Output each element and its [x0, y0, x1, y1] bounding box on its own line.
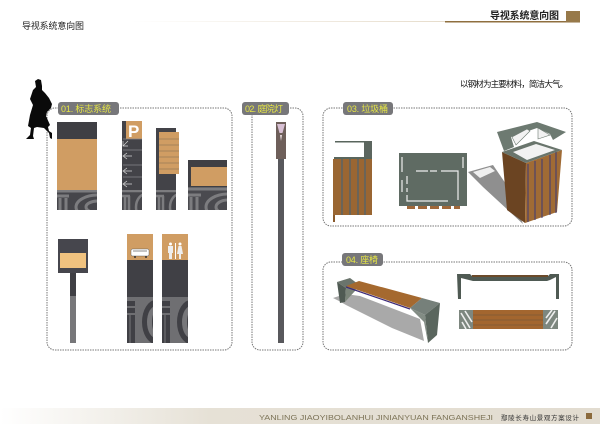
label: 01: 01. 标志系统: [61, 103, 111, 114]
label: 03: [343, 102, 393, 115]
header title right: 导视系统意向图: [490, 9, 559, 22]
label: 02: [242, 102, 289, 115]
bench front elevation: [457, 274, 559, 299]
footer square: [586, 413, 592, 419]
icon: silhouette woman: [26, 79, 52, 139]
bin shadow: [468, 165, 523, 224]
label: 01: [58, 102, 119, 115]
label: 03: 03. 垃圾桶: [347, 103, 388, 114]
label: 04: [342, 253, 383, 266]
bench plan view: [459, 310, 558, 329]
header square: [566, 11, 580, 22]
sign C: [156, 128, 179, 210]
footer band: [0, 408, 600, 424]
bin side view: [333, 141, 372, 222]
bus sign: [127, 234, 153, 343]
pole sign: [58, 239, 88, 343]
description note: 以钢材为主要材料，简洁大气。: [460, 79, 568, 89]
restroom sign: [162, 234, 188, 343]
lamp head: [276, 122, 286, 159]
sign A: [57, 122, 97, 210]
footer Chinese text: 鄢陵长寿山景观方案设计: [501, 413, 580, 422]
sign B: parking: P: [128, 122, 139, 141]
sign B: parking: [122, 121, 142, 210]
header rule: [130, 21, 580, 22]
page title left: 导视系统意向图: [22, 20, 84, 31]
panel: 01 signage system: [47, 102, 250, 350]
sign D: [188, 160, 227, 210]
bench 3D: [333, 278, 440, 343]
panel: 04 bench: [323, 253, 572, 350]
panel: 02 garden lamp: [242, 102, 303, 350]
panel: 03 trash bin: [323, 102, 572, 226]
label: 04: 04. 座椅: [346, 254, 378, 265]
lamp pole: [278, 158, 284, 343]
label: 02: 02. 庭院灯: [245, 103, 283, 114]
footer English text: YANLING JIAOYIBOLANHUI JINIANYUAN FANGANSHEJI: [259, 415, 493, 422]
bin 3D: [497, 122, 566, 223]
bin top view: [399, 153, 467, 208]
